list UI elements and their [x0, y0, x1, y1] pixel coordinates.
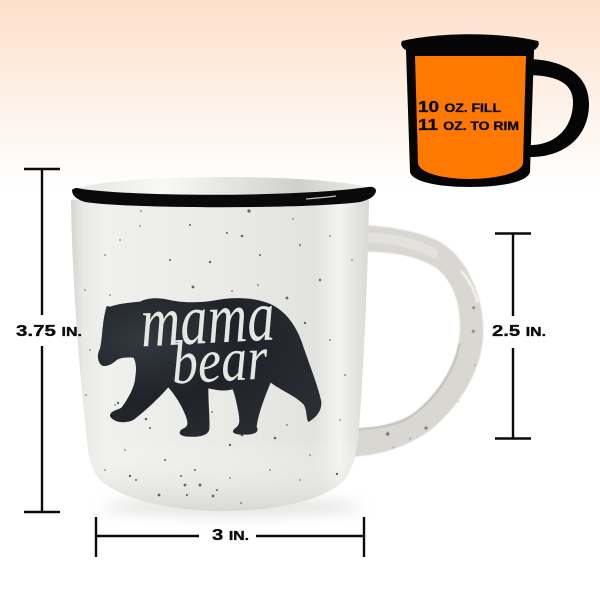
- rim highlight: [306, 196, 336, 199]
- background gradient: [0, 0, 600, 190]
- bear lettering: mama: [138, 276, 276, 362]
- speckles: [84, 209, 353, 504]
- bear lettering: bear: [170, 325, 270, 397]
- icon: mug handle: [525, 59, 589, 157]
- icon: mug body silhouette: [401, 34, 539, 187]
- capacity text: [418, 99, 519, 134]
- mug ground shadow: [102, 498, 362, 516]
- capacity text: 11 OZ. TO RIM: [418, 117, 519, 134]
- mug body: [71, 200, 369, 511]
- dimension: handle 2.5 in: 2.5 IN.: [492, 323, 546, 340]
- mug photo: [71, 177, 483, 516]
- bear silhouette: [98, 298, 321, 437]
- capacity text: 10 OZ. FILL: [418, 99, 501, 116]
- mug interior: [74, 177, 374, 207]
- dimension: width 3 in: 3 IN.: [212, 527, 249, 544]
- mug base shading: [87, 440, 358, 511]
- dimension: handle 2.5 in: [492, 234, 546, 438]
- bear lettering: [138, 276, 276, 397]
- dimension: height 3.75 in: [16, 169, 82, 512]
- icon: orange fill: [415, 56, 526, 179]
- dimension: width 3 in: [96, 517, 364, 557]
- black enamel rim: [72, 187, 376, 207]
- dimension: height 3.75 in: 3.75 IN.: [16, 323, 82, 340]
- mug handle: [353, 225, 483, 457]
- capacity mug icon: [401, 34, 589, 187]
